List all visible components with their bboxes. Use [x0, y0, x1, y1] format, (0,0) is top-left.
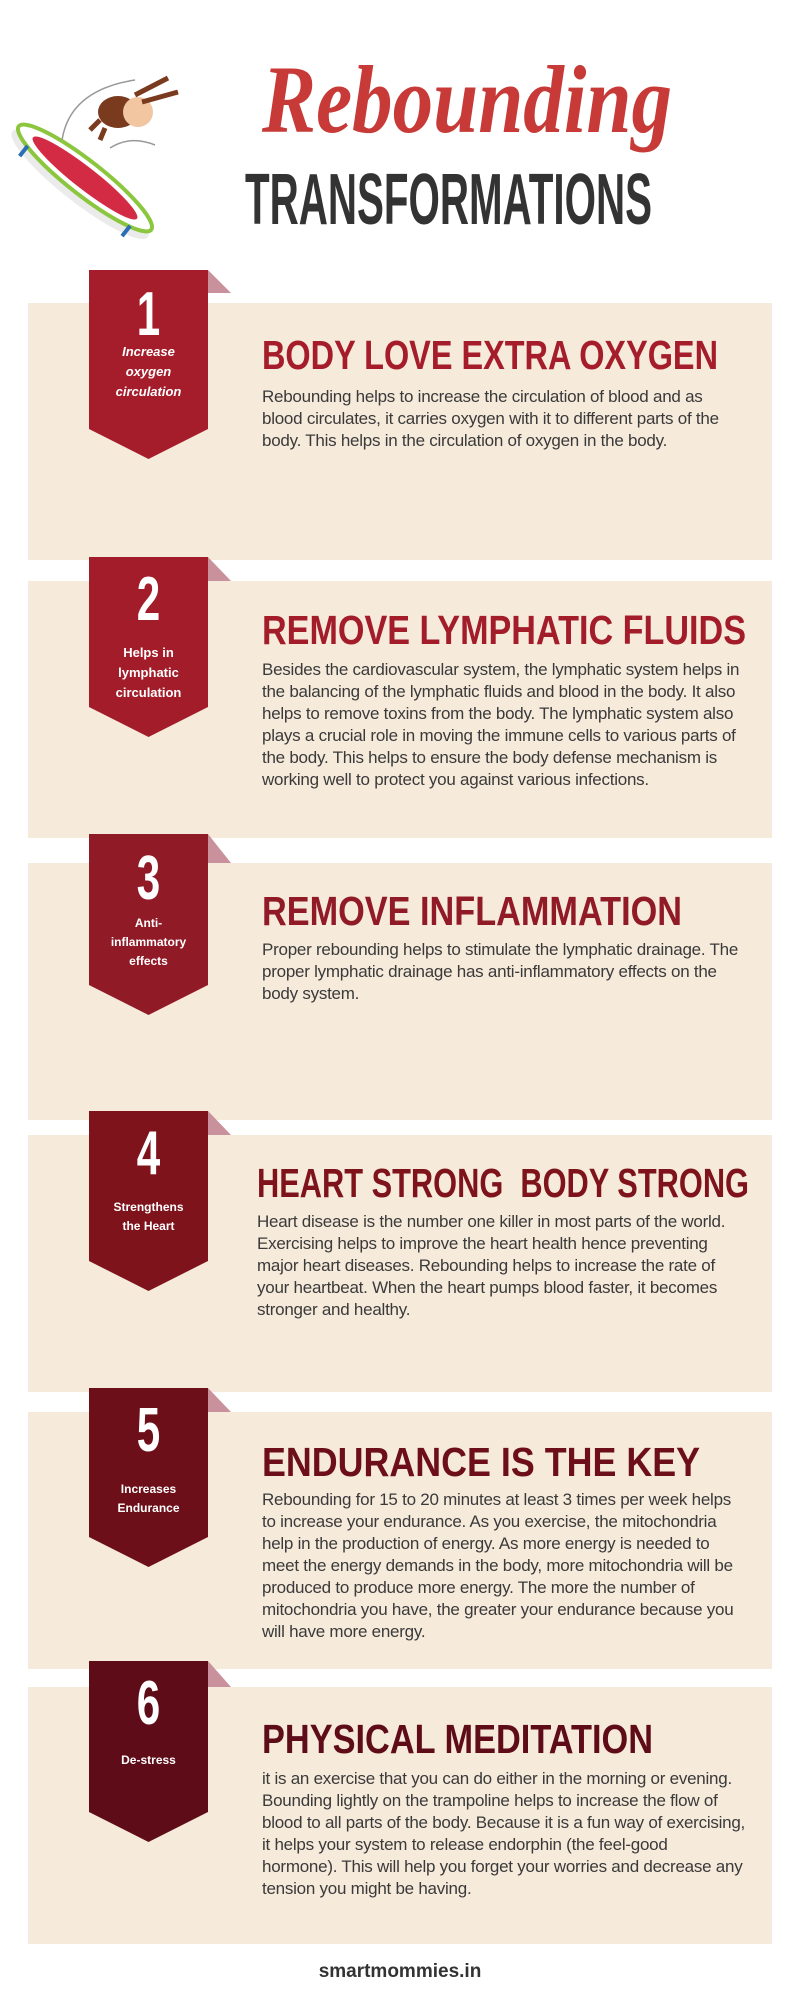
ribbon 2: circulation	[116, 685, 181, 700]
text 2: working well to protect you against various infections.	[262, 770, 649, 789]
ribbon 4: 4	[137, 1119, 160, 1188]
text 4: Exercising helps to improve the heart health hence preventing	[257, 1234, 708, 1253]
text 1: blood circulates, it carries oxygen with it to different parts of the	[262, 409, 719, 428]
panel: 1 oxygen	[28, 270, 772, 560]
text 2	[262, 660, 739, 789]
illustration: monkey on trampoline	[12, 76, 179, 239]
text 4: major heart diseases. Rebounding helps to increase the rate of	[257, 1256, 715, 1275]
text 1	[262, 387, 719, 450]
text 2: the body. This helps to ensure the body defense mechanism is	[262, 748, 717, 767]
ribbon 5: 5	[137, 1396, 160, 1465]
text 6	[262, 1769, 745, 1898]
text 4: Heart disease is the number one killer in most parts of the world.	[257, 1212, 725, 1231]
ribbon 2: Helps in	[123, 645, 174, 660]
ribbon 5: Endurance	[117, 1501, 180, 1515]
text 2: the balancing of the lymphatic fluids and blood in the body. It also	[262, 682, 735, 701]
title	[245, 46, 672, 230]
text 6: it helps your system to release endorphin (the feel-good	[262, 1835, 668, 1854]
text 5: will have more energy.	[262, 1622, 425, 1641]
text 4: your heartbeat. When the heart pumps blood faster, it becomes	[257, 1278, 717, 1297]
ribbon 3: Anti-	[135, 916, 162, 930]
ribbon 2: 2	[137, 565, 160, 634]
text 3: Proper rebounding helps to stimulate the lymphatic drainage. The	[262, 940, 738, 959]
text 2: Besides the cardiovascular system, the lymphatic system helps in	[262, 660, 739, 679]
ribbon 6: 6	[137, 1669, 160, 1738]
text 3	[262, 940, 738, 1003]
ribbon 3: effects	[129, 954, 168, 968]
text 5: to increase your endurance. As you exercise, the mitochondria	[262, 1512, 716, 1531]
ribbon 4: the Heart	[122, 1219, 174, 1233]
text 3: body system.	[262, 984, 359, 1003]
ribbon 5	[89, 1388, 231, 1567]
ribbon 1: oxygen	[126, 364, 171, 379]
ribbon 1: circulation	[116, 384, 181, 399]
ribbon 2	[89, 557, 231, 737]
ribbon 3: 3	[137, 844, 160, 913]
ribbon 1	[89, 270, 231, 459]
text 6: Bounding lightly on the trampoline helps to increase the flow of	[262, 1791, 718, 1810]
ribbon 4	[89, 1111, 231, 1291]
ribbon 5: Increases	[121, 1482, 176, 1496]
text 5	[262, 1490, 733, 1641]
text 5: help in the production of energy. As more energy is needed to	[262, 1534, 710, 1553]
ribbon 4: Strengthens	[113, 1200, 184, 1214]
ribbon 2: lymphatic	[118, 665, 179, 680]
ribbon 3: inflammatory	[111, 935, 186, 949]
text 6: blood to all parts of the body. Because it is a fun way of exercising,	[262, 1813, 745, 1832]
text 6: tension you might be having.	[262, 1879, 471, 1898]
text 5: Rebounding for 15 to 20 minutes at least 3 times per week helps	[262, 1490, 731, 1509]
ribbon 6: De-stress	[121, 1753, 176, 1767]
text 2: helps to remove toxins from the body. The lymphatic system also	[262, 704, 733, 723]
panel: 6 meditation	[28, 1661, 772, 1944]
panel: 5 endurance	[28, 1388, 772, 1669]
text 4	[257, 1212, 725, 1319]
text 3: proper lymphatic drainage has anti-inflammatory effects on the	[262, 962, 717, 981]
footer: smartmommies.in	[319, 1961, 481, 1982]
text 5: mitochondria you have, the greater your endurance because you	[262, 1600, 733, 1619]
ribbon 3	[89, 834, 231, 1015]
text 2: plays a crucial role in moving the immune cells to various parts of	[262, 726, 736, 745]
panel: 2 lymphatic	[28, 557, 772, 838]
panel: 3 inflammation	[28, 834, 772, 1120]
ribbon 1: Increase	[122, 344, 175, 359]
text 6: it is an exercise that you can do either in the morning or evening.	[262, 1769, 732, 1788]
text 4: stronger and healthy.	[257, 1300, 410, 1319]
text 1: Rebounding helps to increase the circulation of blood and as	[262, 387, 703, 406]
text 1: body. This helps in the circulation of oxygen in the body.	[262, 431, 667, 450]
panel: 4 heart	[28, 1111, 772, 1392]
text 6: hormone). This will help you forget your worries and decrease any	[262, 1857, 742, 1876]
text 5: meet the energy demands in the body, more mitochondria will be	[262, 1556, 733, 1575]
ribbon 1: 1	[137, 280, 160, 349]
text 5: produced to produce more energy. The more the number of	[262, 1578, 695, 1597]
ribbon 6	[89, 1661, 231, 1842]
